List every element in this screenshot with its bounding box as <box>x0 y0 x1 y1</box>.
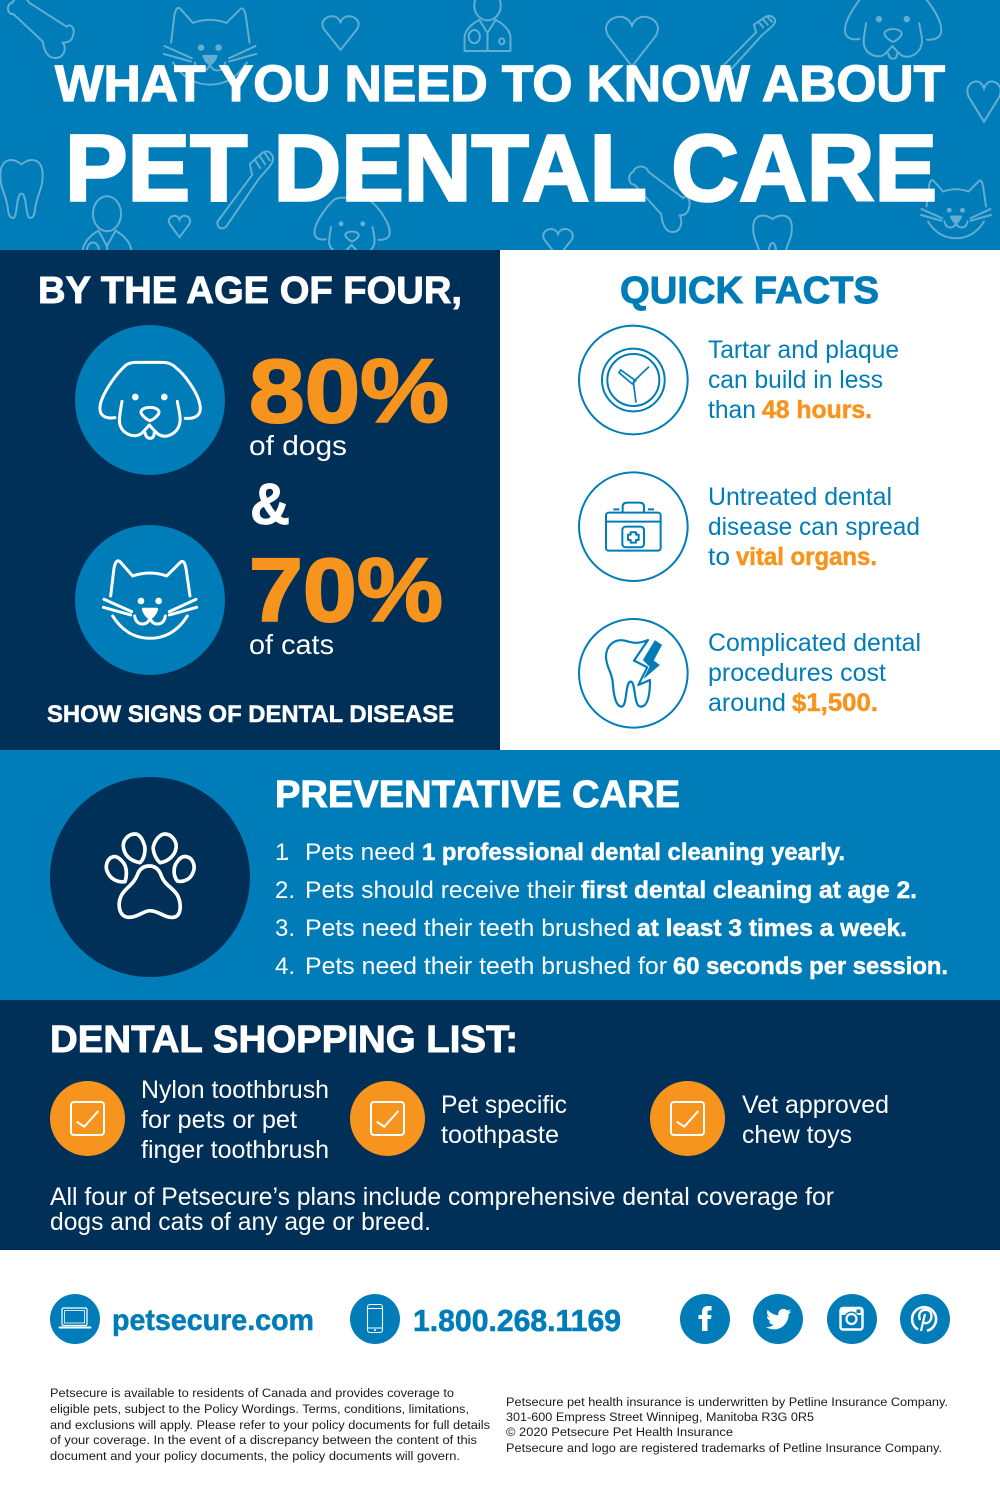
care list item 1: 1 professional dental cleaning yearly. <box>422 839 845 866</box>
care list item 1: Pets need <box>305 839 415 866</box>
item: pet specific toothpaste: Pet specific <box>441 1091 567 1119</box>
fact: procedure cost: procedures cost <box>708 659 886 687</box>
coverage note <box>50 1183 834 1236</box>
website: petsecure.com <box>112 1304 314 1337</box>
coverage note: All four of Petsecure’s plans include comprehensive dental coverage for <box>50 1183 834 1211</box>
icon: clock <box>579 326 688 434</box>
icon: twitter <box>753 1294 803 1344</box>
legal text right: Petsecure and logo are registered trademarks of Petline Insurance Company. <box>506 1441 942 1455</box>
care list item 4 <box>275 953 948 980</box>
care list item 3: at least 3 times a week. <box>637 915 907 942</box>
preventative care heading: PREVENTATIVE CARE <box>275 774 680 816</box>
coverage note: dogs and cats of any age or breed. <box>50 1208 431 1236</box>
icon: phone <box>350 1294 400 1344</box>
legal text left: document and your policy documents, the policy documents will govern. <box>50 1449 460 1463</box>
care list item 2 <box>275 877 917 904</box>
care list item 2: Pets should receive their <box>305 877 575 904</box>
background pattern of pet icons <box>0 0 1000 267</box>
legal text left: Petsecure is available to residents of Canada and provides coverage to <box>50 1386 454 1400</box>
ampersand: & <box>250 472 290 537</box>
fact: procedure cost <box>708 629 921 717</box>
fact: procedure cost: around <box>708 689 786 717</box>
legal text left <box>50 1386 490 1463</box>
fact: untreated disease <box>708 483 920 571</box>
legal text left: of your coverage. In the event of a discrepancy between the content of this <box>50 1433 477 1447</box>
fact: untreated disease: Untreated dental <box>708 483 892 511</box>
fact: tartar and plaque: can build in less <box>708 366 883 394</box>
icon: checkbox 1 <box>50 1081 125 1156</box>
fact: untreated disease: to <box>708 543 730 571</box>
stat: 70% of cats: 70% <box>249 541 443 641</box>
stat: 80% of dogs: of dogs <box>249 430 347 461</box>
icon: checkbox 2 <box>350 1081 425 1156</box>
fact: tartar and plaque: 48 hours. <box>762 396 872 424</box>
care list item 4: Pets need their teeth brushed for <box>305 953 667 980</box>
icon: instagram <box>827 1294 877 1344</box>
icon: laptop <box>50 1294 100 1344</box>
icon: checkbox 3 <box>650 1081 725 1156</box>
legal text left: eligible pets, subject to the Policy Wordings. Terms, conditions, limitations, <box>50 1402 469 1416</box>
icon: facebook <box>680 1294 730 1344</box>
item: vet approved chew toys: chew toys <box>742 1121 852 1149</box>
icon: medical kit <box>579 472 688 581</box>
fact: tartar and plaque: than <box>708 396 756 424</box>
fact: tartar and plaque <box>708 336 899 424</box>
icon: paw <box>50 777 250 977</box>
panel: dental shopping list <box>0 1000 1000 1250</box>
item: nylon toothbrush <box>141 1076 329 1164</box>
icon: tooth with bolt <box>579 619 688 728</box>
care list item 3: Pets need their teeth brushed <box>305 915 631 942</box>
panel footer line: SHOW SIGNS OF DENTAL DISEASE <box>47 701 454 728</box>
icon: pinterest <box>900 1294 950 1344</box>
legal text right: © 2020 Petsecure Pet Health Insurance <box>506 1425 733 1439</box>
care list item 1: 1. <box>275 839 290 866</box>
item: pet specific toothpaste: toothpaste <box>441 1121 559 1149</box>
item: nylon toothbrush: Nylon toothbrush <box>141 1076 329 1104</box>
shopping list heading: DENTAL SHOPPING LIST: <box>50 1019 518 1061</box>
item: vet approved chew toys <box>742 1091 889 1149</box>
quick facts heading: QUICK FACTS <box>620 270 879 312</box>
fact: procedure cost: Complicated dental <box>708 629 921 657</box>
header banner <box>0 0 1000 267</box>
care list item 2: 2. <box>275 877 295 904</box>
item: vet approved chew toys: Vet approved <box>742 1091 889 1119</box>
stat: 80% of dogs: 80% <box>249 342 449 442</box>
icon: cat <box>75 525 225 675</box>
contact row <box>50 1294 950 1344</box>
title line 2: PET DENTAL CARE <box>65 116 937 222</box>
stat: 70% of cats: of cats <box>249 629 334 660</box>
care list item 3 <box>275 915 907 942</box>
legal text left: and exclusions will apply. Please refer to your policy documents for full details <box>50 1418 490 1432</box>
legal text right <box>506 1395 948 1455</box>
item: nylon toothbrush: for pets or pet <box>141 1106 297 1134</box>
item: pet specific toothpaste <box>441 1091 567 1149</box>
panel: preventative care <box>0 750 1000 1000</box>
panel: quick facts <box>579 270 921 728</box>
care list item 3: 3. <box>275 915 295 942</box>
fact: untreated disease: vital organs. <box>736 543 877 571</box>
care list item 2: first dental cleaning at age 2. <box>581 877 917 904</box>
panel heading: BY THE AGE OF FOUR, <box>38 270 462 312</box>
phone number: 1.800.268.1169 <box>413 1303 621 1338</box>
legal text right: 301-600 Empress Street Winnipeg, Manitoba R3G 0R5 <box>506 1410 814 1424</box>
care list item 4: 60 seconds per session. <box>673 953 948 980</box>
fact: untreated disease: disease can spread <box>708 513 920 541</box>
title line 1: WHAT YOU NEED TO KNOW ABOUT <box>55 55 945 112</box>
panel: by the age of four <box>0 250 500 750</box>
care list item 4: 4. <box>275 953 295 980</box>
item: nylon toothbrush: finger toothbrush <box>141 1136 329 1164</box>
fact: procedure cost: $1,500. <box>792 689 878 717</box>
fact: tartar and plaque: Tartar and plaque <box>708 336 899 364</box>
icon: dog <box>75 325 225 475</box>
legal text right: Petsecure pet health insurance is underwritten by Petline Insurance Company. <box>506 1395 948 1409</box>
